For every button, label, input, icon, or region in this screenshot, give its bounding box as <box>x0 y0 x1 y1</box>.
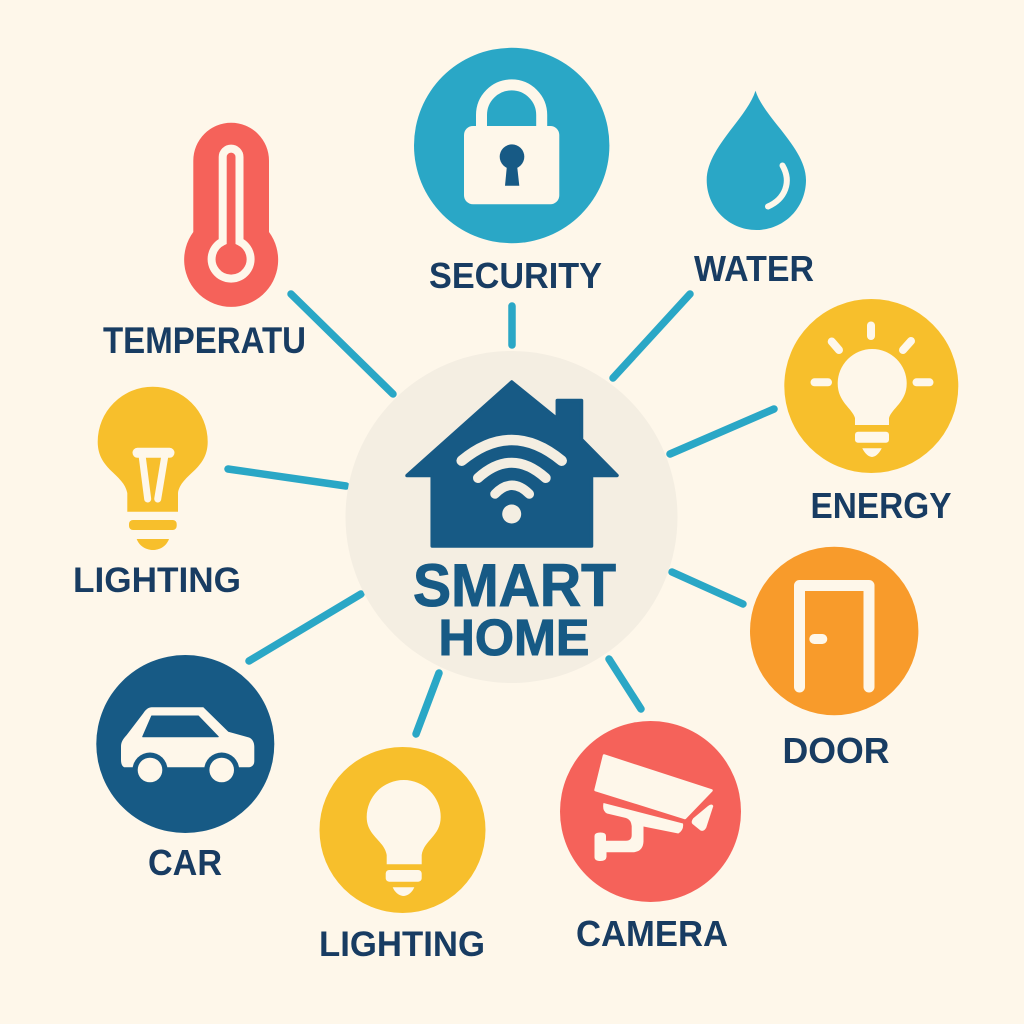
icon: light bulb with rays <box>784 299 958 473</box>
label: temperature: TEMPERATU <box>103 320 306 361</box>
icon: door <box>750 547 918 715</box>
node: camera <box>560 721 741 954</box>
label: door: DOOR <box>782 730 890 771</box>
icon: security camera <box>560 721 741 902</box>
hub title <box>413 552 616 666</box>
node: lighting left <box>73 387 241 600</box>
label: camera: CAMERA <box>576 913 728 954</box>
icon: car <box>96 655 274 833</box>
node: energy <box>784 299 958 526</box>
central hub <box>346 351 678 683</box>
node: temperature <box>103 123 306 361</box>
connector lines <box>228 294 774 734</box>
icon: light bulb <box>320 747 486 913</box>
label: energy: ENERGY <box>810 485 952 526</box>
node: lighting bottom <box>319 747 486 964</box>
hub title: HOME <box>438 609 590 666</box>
node: water <box>694 91 814 289</box>
icon: filament bulb <box>98 387 208 550</box>
node: car <box>96 655 274 883</box>
label: lighting: LIGHTING <box>319 925 485 964</box>
icon: padlock <box>414 48 609 243</box>
icon: smart house with wifi <box>407 382 617 546</box>
hub title: SMART <box>413 552 616 619</box>
label: lighting: LIGHTING <box>73 561 241 600</box>
label: water: WATER <box>694 248 814 289</box>
label: car: CAR <box>148 842 222 883</box>
icon: thermometer <box>184 123 278 307</box>
node: security <box>414 48 609 296</box>
node: door <box>750 547 918 771</box>
icon: water drop <box>707 91 806 230</box>
label: security: SECURITY <box>429 255 602 296</box>
